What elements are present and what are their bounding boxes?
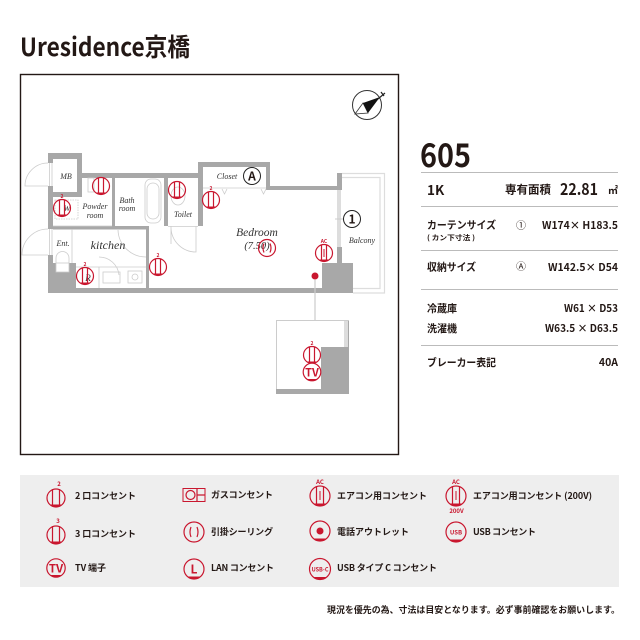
legend: USB-C outlet [310, 558, 437, 580]
layout type and area: 22.81 [560, 176, 598, 200]
callout: curtain 1: 1 [348, 210, 356, 228]
icon: compass [352, 90, 385, 120]
socket: air conditioner: AC [320, 238, 328, 245]
socket: niche: 2 [311, 340, 314, 347]
legend: USB-C outlet: USB タイプ C コンセント [337, 561, 437, 574]
refrigerator size: 冷蔵庫 [427, 301, 457, 316]
layout type and area: ㎡ [608, 182, 618, 197]
legend: USB outlet [446, 522, 536, 542]
panel: unit details [420, 131, 618, 370]
panel: floor plan frame [20, 74, 398, 454]
room labels [55, 172, 376, 283]
panel: legend [20, 475, 619, 587]
icon: TV terminal: TV [305, 364, 319, 380]
socket: closet side [202, 185, 220, 208]
legend: TV terminal [47, 559, 106, 577]
room labels: W [64, 204, 72, 213]
room labels: R [84, 273, 91, 283]
legend: USB outlet: USB コンセント [473, 525, 536, 538]
legend: AC outlet: AC [315, 477, 324, 486]
curtain size: ( カン下寸法 ) [427, 233, 475, 243]
legend: AC 200V outlet: エアコン用コンセント (200V) [473, 489, 592, 502]
socket: toilet [168, 182, 186, 198]
room labels: Bath [119, 196, 135, 205]
room labels: room [119, 204, 136, 213]
socket: refrigerator [76, 261, 94, 284]
room labels: Ent. [55, 239, 70, 248]
socket: washer [54, 193, 70, 216]
legend: LAN outlet: LAN コンセント [211, 561, 274, 574]
washer size: 洗濯機 [427, 321, 457, 336]
legend: AC 200V outlet: 200V [449, 506, 464, 515]
legend: 2-gang outlet: 2 [57, 479, 61, 488]
balcony outline [337, 174, 384, 293]
socket: bedroom west wall: 2 [157, 252, 160, 259]
room labels: Bedroom [236, 227, 278, 239]
fixtures and door swings [22, 163, 266, 288]
socket: washer: 2 [61, 193, 64, 200]
room labels: kitchen [91, 238, 125, 252]
legend: 3-gang outlet [47, 516, 136, 544]
layout type and area: 専有面積 [505, 182, 551, 198]
legend: AC outlet: エアコン用コンセント [337, 489, 427, 502]
room labels: Powder [82, 202, 108, 211]
legend: AC 200V outlet [446, 477, 592, 515]
storage size [427, 258, 618, 275]
layout type and area [427, 176, 618, 200]
socket: bedroom west wall [150, 252, 166, 276]
room labels: (7.50) [244, 241, 270, 252]
footer note: 現況を優先の為、寸法は目安となります。必ず事前確認をお願いします。 [327, 603, 620, 616]
washer size [427, 321, 618, 336]
breaker: 40A [599, 355, 618, 370]
icon: ceiling fitting [258, 240, 276, 256]
title: Uresidence京橋 [20, 28, 190, 64]
room number: 605 [420, 131, 471, 177]
legend: AC outlet [310, 477, 427, 506]
room labels: Closet [217, 172, 238, 181]
layout type and area: 1K [427, 179, 445, 199]
storage size: Ⓐ [516, 258, 526, 273]
socket: closet side: 2 [210, 185, 213, 192]
socket: refrigerator: 2 [84, 261, 87, 268]
legend: USB outlet: USB [450, 528, 462, 536]
legend: LAN outlet: L [191, 560, 198, 578]
callout: closet A: A [247, 168, 256, 184]
curtain size: ① [516, 217, 526, 232]
washer size: W63.5 × D63.5 [545, 321, 618, 336]
walls [48, 153, 353, 293]
legend: telephone outlet: 電話アウトレット [337, 525, 409, 538]
legend: 3-gang outlet: 3 口コンセント [75, 527, 136, 540]
storage size: W142.5× D54 [548, 260, 618, 275]
refrigerator size: W61 × D53 [564, 301, 618, 316]
legend: gas outlet [183, 488, 273, 502]
legend: ceiling fitting: 引掛シーリング [211, 525, 273, 538]
legend: LAN outlet [184, 559, 274, 579]
breaker: ブレーカー表記 [427, 355, 496, 370]
curtain size: W174× H183.5 [542, 218, 618, 233]
icon: telephone outlet [312, 272, 318, 320]
refrigerator size [427, 301, 618, 316]
storage size: 収納サイズ [427, 260, 476, 274]
legend: 2-gang outlet: 2 口コンセント [75, 489, 136, 502]
room labels: room [87, 211, 104, 220]
legend: 2-gang outlet [47, 479, 136, 507]
callout: curtain 1 [335, 210, 360, 228]
legend: 3-gang outlet: 3 [56, 516, 60, 525]
room labels: Toilet [174, 210, 193, 219]
socket: air conditioner [316, 238, 332, 262]
legend: AC 200V outlet: AC [451, 477, 460, 486]
legend: gas outlet: ガスコンセント [211, 488, 273, 501]
curtain size [427, 217, 618, 243]
legend: TV terminal: TV 端子 [75, 561, 106, 574]
legend: telephone outlet [310, 521, 409, 541]
socket: powder room [92, 178, 110, 194]
inset: niche [276, 320, 349, 394]
room labels: Balcony [349, 236, 376, 245]
legend: USB-C outlet: USB-C [312, 566, 329, 574]
curtain size: カーテンサイズ [427, 218, 496, 232]
callout: closet A [244, 168, 260, 184]
legend: ceiling fitting [184, 522, 273, 542]
room labels: MB [59, 172, 72, 181]
legend: TV terminal: TV [49, 560, 64, 576]
breaker [427, 355, 618, 370]
